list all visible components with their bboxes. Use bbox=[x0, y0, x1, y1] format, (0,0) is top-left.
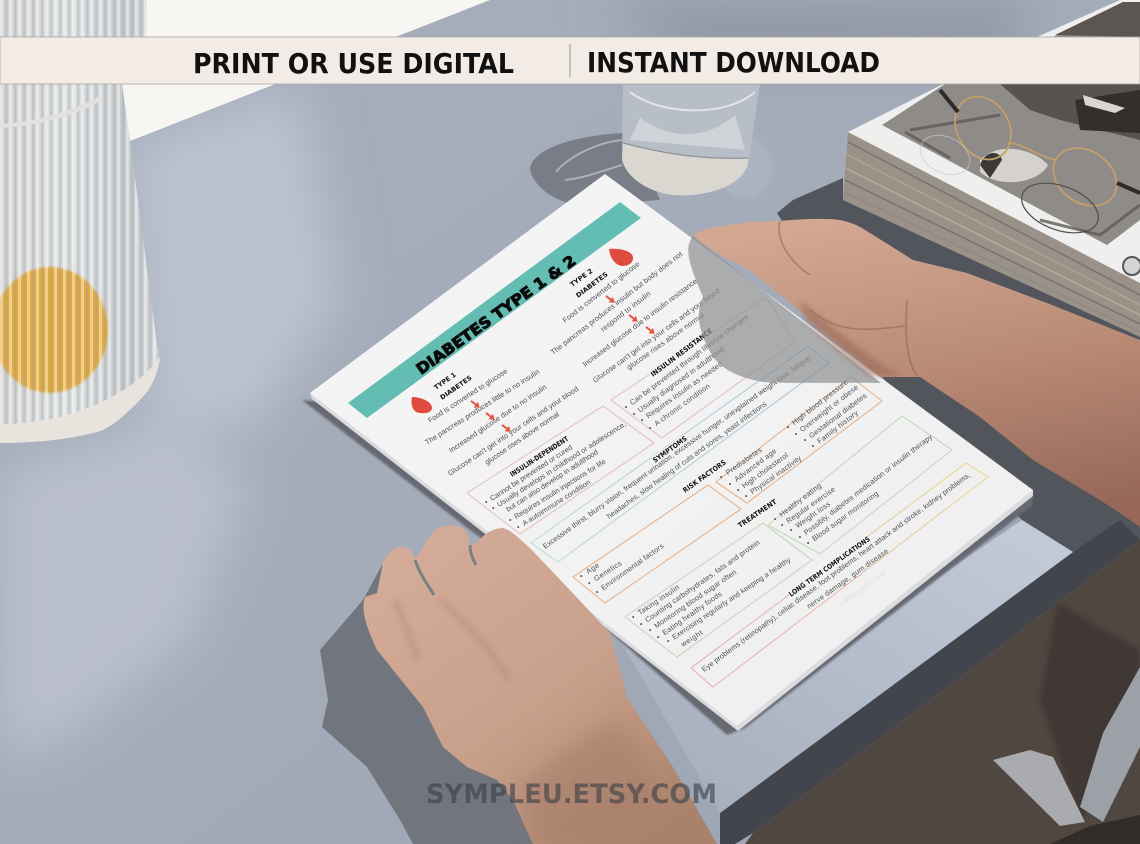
type 1 process text: Increased glucose due to no insulin bbox=[447, 382, 548, 455]
list: type 2 treatment: • Weight loss bbox=[787, 499, 832, 534]
arrows bbox=[469, 398, 513, 434]
list: • A autoimmune condition bbox=[515, 478, 592, 531]
list: right: • Gestational diabetes bbox=[801, 391, 869, 444]
front table edge and lap bbox=[620, 520, 1140, 844]
list: • Usually diagnosed in adulthood bbox=[630, 345, 726, 418]
type 1 process text: The pancreas produces little to no insulin bbox=[423, 367, 541, 447]
type 2 column bbox=[549, 249, 722, 385]
symptoms text: headaches, slow healing of cuts and sores, yeast infections bbox=[605, 399, 769, 521]
list: • Usually develops in childhood or adolescence, bbox=[490, 419, 628, 512]
title band bbox=[348, 202, 641, 418]
list: right bbox=[784, 377, 869, 450]
top banner bbox=[0, 37, 1140, 84]
heading: long term complications: LONG TERM COMPLICATIONS bbox=[788, 535, 872, 599]
type 1 heading: TYPE 1 bbox=[433, 370, 458, 392]
sheet face bbox=[310, 174, 1033, 726]
list: • Requires insulin injections for life bbox=[507, 457, 607, 524]
banner text: print or use digital: PRINT OR USE DIGITAL bbox=[193, 48, 514, 80]
list: type 2 treatment: • Possibly, diabetes medication or insulin therapy bbox=[796, 432, 934, 541]
type 2 process text: glucose rises above normal bbox=[625, 310, 706, 372]
list: left: • Environmental factors bbox=[593, 541, 666, 596]
heading: insulin resistance: INSULIN RESISTANCE bbox=[649, 327, 714, 379]
list: right: • Family history bbox=[809, 408, 860, 450]
sheet edge thickness bbox=[310, 393, 1033, 731]
list: left: • Genetics bbox=[586, 558, 624, 587]
magazine stack bbox=[843, 0, 1140, 337]
panel: long term complications bbox=[691, 463, 988, 687]
panel: treatment bbox=[625, 416, 952, 657]
list: type 1 treatment: • Counting carbohydrates, fats and protein bbox=[637, 538, 761, 628]
palm crease bbox=[779, 221, 918, 377]
panel: symptoms bbox=[531, 346, 829, 562]
right hand and forearm bbox=[693, 219, 1140, 527]
paper shadow bbox=[302, 400, 1033, 735]
list: type 1 treatment: • Taking insulin bbox=[630, 583, 681, 621]
list: middle: • High cholesterol bbox=[734, 450, 790, 494]
list: right: • High blood pressure bbox=[784, 377, 850, 431]
heading: symptoms: SYMPTOMS bbox=[651, 435, 689, 465]
striped glass pitcher bbox=[0, 0, 160, 443]
list: middle bbox=[717, 445, 803, 500]
printed sheet bbox=[310, 174, 1033, 731]
type 1 process text: Glucose can't get into your cells and your blood bbox=[446, 384, 580, 478]
type 2 heading: TYPE 2 bbox=[569, 267, 594, 289]
type 2 heading bbox=[569, 267, 610, 300]
list: type 1 treatment: • Exercising regularly and keeping a healthy bbox=[665, 555, 793, 645]
panel: risk factors bbox=[573, 377, 882, 603]
list: but can also develop in adulthood bbox=[504, 447, 600, 514]
shadow of the right arm on the table bbox=[777, 178, 1140, 552]
list: type 1 treatment: • Eating healthy foods bbox=[654, 589, 724, 641]
wall behind table bbox=[0, 0, 490, 141]
page curl shadow bbox=[688, 236, 881, 383]
list: left: • Age bbox=[578, 561, 601, 580]
heading: insulin-dependent: INSULIN-DEPENDENT bbox=[509, 435, 570, 479]
complications text: Eye problems (retinopathy), celiac disease, foot problems, heart attack and stroke, kidney problems, bbox=[700, 470, 972, 674]
finger gaps bbox=[415, 545, 476, 595]
eyeglasses bbox=[940, 86, 1140, 218]
type 1 heading: DIABETES bbox=[439, 374, 474, 402]
left hand bbox=[363, 525, 717, 844]
panel: insulin-dependent bbox=[467, 406, 654, 534]
type 2 heading: DIABETES bbox=[574, 270, 610, 300]
list: right: • Overweight or obese bbox=[792, 383, 860, 438]
type 1 process text: glucose rises above normal bbox=[483, 409, 561, 467]
type 2 process text: respond to insulin bbox=[599, 289, 652, 334]
arrows bbox=[604, 293, 657, 336]
type 1 column bbox=[411, 366, 580, 478]
list: type 2 treatment: • Healthy eating bbox=[771, 481, 823, 523]
type 2 process text: Increased glucose due to insulin resistance bbox=[581, 277, 699, 369]
list: type 2 treatment: • Blood sugar monitoring bbox=[804, 489, 880, 547]
type 1 process text: Food is converted to glucose bbox=[426, 366, 509, 425]
lit tabletop bbox=[620, 520, 1073, 813]
banner text: instant download: INSTANT DOWNLOAD bbox=[587, 47, 880, 79]
left hand shadow bbox=[320, 565, 540, 844]
list: • Cannot be prevented or cured bbox=[483, 443, 574, 506]
list: • A chronic condition bbox=[646, 382, 712, 432]
list: middle: • Prediabetes bbox=[717, 445, 764, 481]
trousers bbox=[745, 540, 1140, 844]
list: type 1 treatment: • Monitoring blood sugar often bbox=[647, 567, 738, 634]
heading: risk factors: RISK FACTORS bbox=[682, 458, 728, 495]
icon: blood drop bbox=[609, 249, 633, 266]
list: middle: • Physical inactivity bbox=[742, 453, 803, 500]
list: type 2 treatment: • Regular exercise bbox=[778, 485, 837, 529]
type 2 process text: The pancreas produces insulin but body does not bbox=[549, 249, 684, 357]
list: middle: • Advanced age bbox=[726, 446, 778, 488]
list: • Can be prevented through lifestyle changes bbox=[622, 312, 750, 411]
icon: blood drop bbox=[411, 397, 432, 413]
heading: treatment: TREATMENT bbox=[737, 498, 779, 530]
type 2 process text: Food is converted to glucose bbox=[561, 259, 641, 325]
list: type 1 treatment bbox=[630, 538, 793, 649]
type 2 process text bbox=[549, 249, 722, 385]
symptoms text: Excessive thirst, blurry vision, frequent urination, excessive hunger, unexplained weight loss, fatigue, bbox=[541, 352, 814, 551]
water glass bbox=[530, 84, 773, 205]
table front edge bbox=[720, 520, 1140, 844]
photo watermark: SYMPLEU.ETSY.COM bbox=[426, 779, 717, 810]
title: DIABETES TYPE 1 & 2 bbox=[413, 252, 579, 378]
complications text: nerve damage, gum disease bbox=[805, 546, 890, 611]
type 2 process text: Glucose can't get into your cells and your blood bbox=[591, 286, 722, 385]
panel: insulin resistance bbox=[611, 297, 795, 438]
list: • Requires insulin as needed bbox=[638, 359, 724, 424]
lemon inside the pitcher bbox=[0, 267, 108, 393]
list: type 1 treatment: weight bbox=[678, 628, 704, 649]
sheet watermark: SYMPLEU.ETSY.COM bbox=[838, 570, 888, 609]
